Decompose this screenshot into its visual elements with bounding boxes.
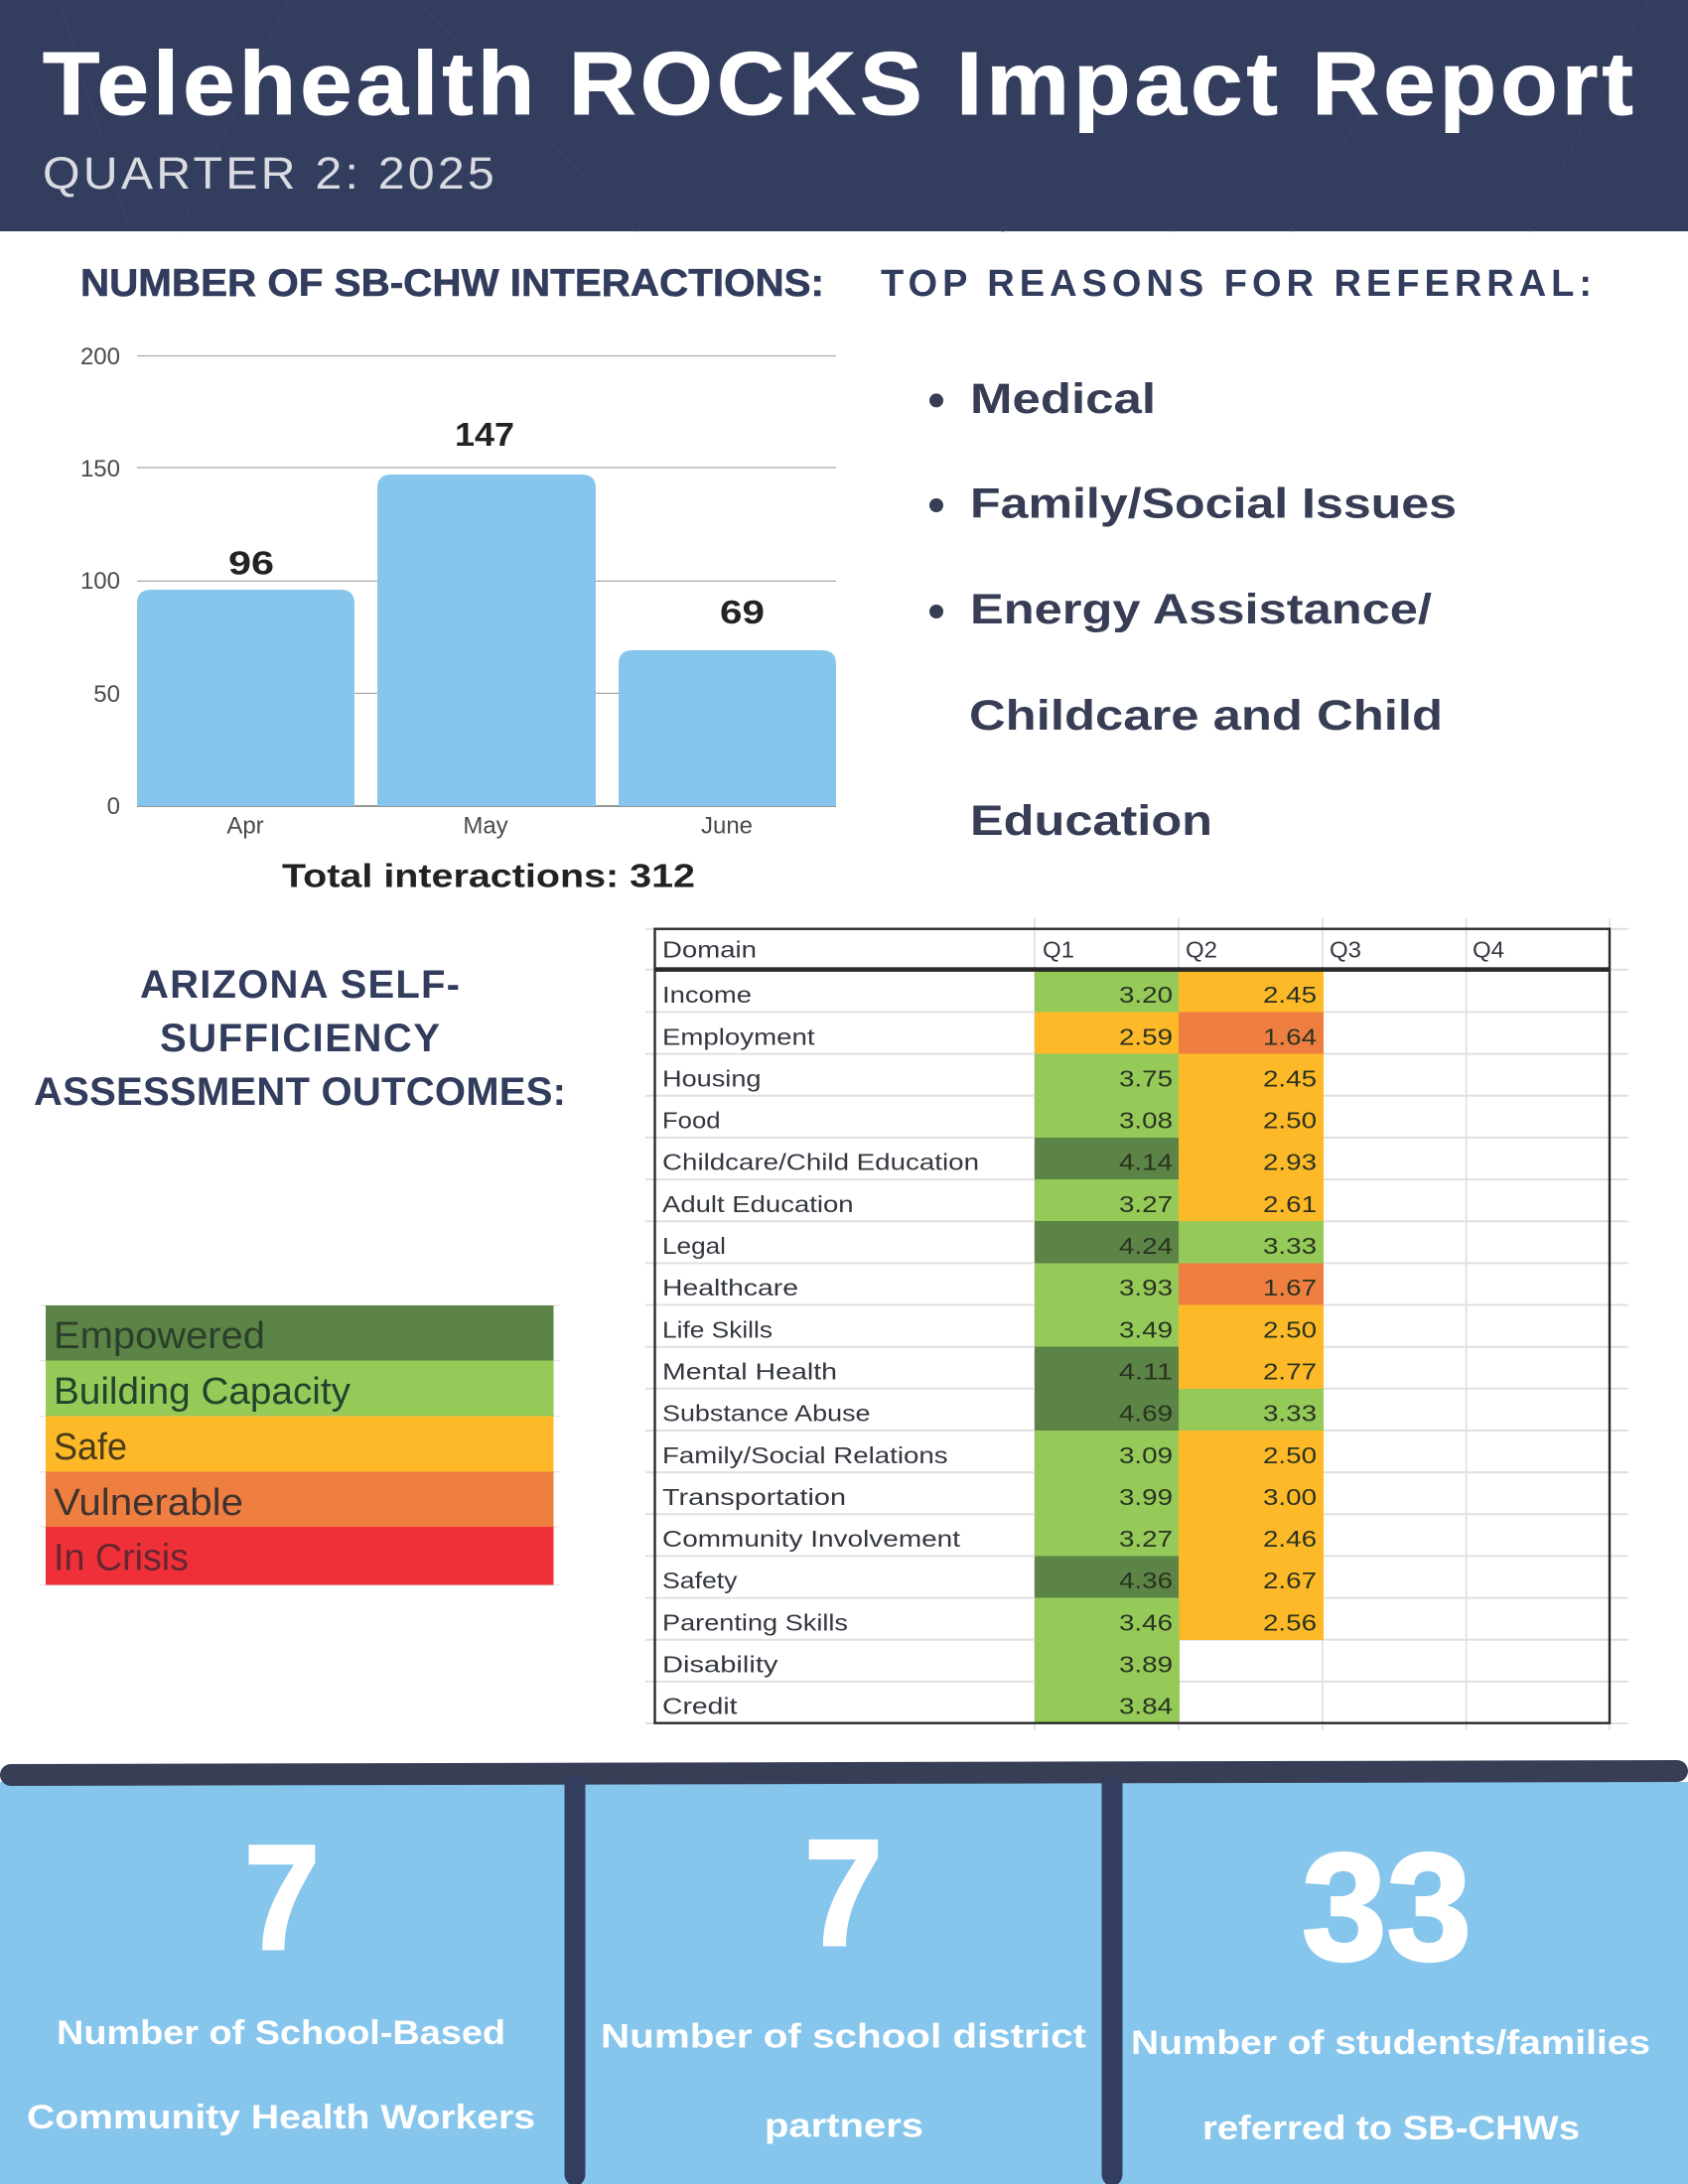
bar: June 69 — [619, 594, 836, 840]
row: Income: 3.20 — [1119, 982, 1173, 1008]
row: Life Skills: 3.49 — [1119, 1316, 1173, 1342]
row: Safety: Safety — [662, 1568, 738, 1593]
stat: school district partners — [601, 1809, 1086, 2145]
bar: April 96: Apr — [226, 812, 264, 840]
row: Family/Social Relations: Family/Social Relations — [662, 1442, 948, 1468]
row: Housing: 3.75 — [1119, 1065, 1173, 1091]
referral reasons list: Energy Assistance/ — [970, 586, 1432, 633]
row: Family/Social Relations — [662, 1431, 1324, 1473]
row: Life Skills: 2.50 — [1263, 1316, 1317, 1342]
row: Credit: Credit — [662, 1694, 738, 1719]
stat: students and families referred: Number of students/families — [1131, 2024, 1650, 2062]
subtitle: QUARTER 2: 2025 — [43, 148, 497, 199]
heading: self-sufficiency outcomes: SUFFICIENCY — [160, 1017, 440, 1060]
row: Employment: 1.64 — [1263, 1024, 1317, 1049]
row: Community Involvement: Community Involvement — [662, 1526, 961, 1552]
row: Life Skills — [662, 1304, 1324, 1347]
total interactions caption: Total interactions: 312 — [282, 858, 695, 893]
row: Parenting Skills: 2.56 — [1263, 1609, 1317, 1635]
row: Community Involvement: 3.27 — [1119, 1526, 1173, 1552]
stat: school district partners: partners — [765, 2108, 923, 2145]
y axis labels — [80, 343, 120, 820]
y axis labels: 0 — [107, 793, 120, 820]
heading: self-sufficiency outcomes: ASSESSMENT OUTCOMES: — [34, 1070, 566, 1114]
referral reasons list — [929, 375, 1457, 845]
row: Childcare/Child Education: 4.14 — [1119, 1150, 1173, 1175]
legend: assessment levels: Building Capacity — [54, 1371, 351, 1413]
stat: students and families referred — [1131, 1822, 1650, 2147]
stats band — [0, 1771, 1688, 2184]
row: Income — [662, 970, 1324, 1013]
y axis labels: 150 — [80, 456, 120, 482]
row: Healthcare: Healthcare — [662, 1275, 798, 1300]
legend: assessment levels: Safe — [54, 1427, 127, 1468]
bar: June 69: June — [701, 812, 753, 840]
row: Employment: 2.59 — [1119, 1024, 1173, 1049]
row: Transportation — [662, 1472, 1324, 1515]
bar chart: interactions by month — [80, 343, 836, 840]
row: Disability — [662, 1640, 1180, 1682]
row: Adult Education: Adult Education — [662, 1191, 854, 1217]
bar: April 96: 96 — [228, 545, 274, 582]
row: Childcare/Child Education: 2.93 — [1263, 1150, 1317, 1175]
heading: number of interactions: NUMBER OF SB-CHW INTERACTIONS: — [80, 262, 824, 305]
row: Childcare/Child Education: Childcare/Child Education — [662, 1150, 979, 1175]
stat: school district partners: Number of school district — [601, 2018, 1086, 2056]
row: Substance Abuse: 4.69 — [1119, 1401, 1173, 1427]
row: Food: Food — [662, 1108, 721, 1134]
row: Safety — [662, 1556, 1324, 1598]
row: Food: 2.50 — [1263, 1108, 1317, 1134]
row: Parenting Skills — [662, 1598, 1324, 1640]
row: Income: 2.45 — [1263, 982, 1317, 1008]
heading: self-sufficiency outcomes — [34, 963, 566, 1114]
legend: assessment levels: In Crisis — [54, 1538, 189, 1579]
row: Housing: 2.45 — [1263, 1065, 1317, 1091]
table header row — [662, 936, 1504, 962]
row: Mental Health: Mental Health — [662, 1358, 837, 1384]
referral reasons list: Childcare and Child — [969, 692, 1443, 740]
row: Legal: 3.33 — [1263, 1233, 1317, 1259]
row: Food: 3.08 — [1119, 1108, 1173, 1134]
heading: top reasons for referral: TOP REASONS FOR REFERRAL: — [881, 263, 1592, 305]
row: Substance Abuse — [662, 1389, 1324, 1431]
stat: school-based community health workers: Number of School-Based — [57, 2014, 505, 2052]
row: Safety: 4.36 — [1119, 1568, 1173, 1593]
row: Employment — [662, 1013, 1324, 1054]
row: Credit: 3.84 — [1119, 1694, 1173, 1719]
y axis labels: 200 — [80, 343, 120, 370]
row: Adult Education: 3.27 — [1119, 1191, 1173, 1217]
row: Mental Health: 4.11 — [1119, 1358, 1173, 1384]
stats band top bar — [11, 1771, 1677, 1775]
table header row: Q1 — [1043, 936, 1074, 962]
row: Housing: Housing — [662, 1065, 761, 1091]
row: Childcare/Child Education — [662, 1138, 1324, 1179]
row: Income: Income — [662, 982, 752, 1008]
stat: school district partners: 7 — [804, 1809, 883, 1978]
divider 2 — [1102, 1777, 1122, 2184]
row: Legal: Legal — [662, 1233, 726, 1259]
table header row: Q4 — [1473, 936, 1504, 962]
row: Mental Health: 2.77 — [1263, 1358, 1317, 1384]
referral reasons list: Family/Social Issues — [970, 480, 1457, 528]
stat: students and families referred: 33 — [1302, 1822, 1472, 1992]
row: Healthcare: 3.93 — [1119, 1275, 1173, 1300]
row: Mental Health — [662, 1347, 1324, 1389]
heading: self-sufficiency outcomes: ARIZONA SELF- — [140, 963, 460, 1007]
title: Telehealth ROCKS Impact Report — [43, 35, 1637, 134]
y axis labels: 100 — [80, 568, 120, 595]
row: Parenting Skills: Parenting Skills — [662, 1609, 848, 1635]
row: Healthcare: 1.67 — [1263, 1275, 1317, 1300]
row: Parenting Skills: 3.46 — [1119, 1609, 1173, 1635]
row: Housing — [662, 1054, 1324, 1096]
row: Disability: 3.89 — [1119, 1651, 1173, 1677]
bar: May 147: 147 — [455, 416, 514, 453]
row: Family/Social Relations: 2.50 — [1263, 1442, 1317, 1468]
header banner — [0, 0, 1688, 231]
legend: assessment levels: Empowered — [54, 1315, 265, 1357]
referral reasons list: Education — [970, 797, 1212, 845]
row: Food — [662, 1096, 1324, 1138]
referral reasons list: Medical — [970, 375, 1156, 423]
legend: assessment levels — [40, 1305, 560, 1585]
bar: June 69: 69 — [720, 594, 765, 630]
row: Community Involvement — [662, 1514, 1324, 1557]
stat: school-based community health workers — [27, 1814, 535, 2136]
stat: school-based community health workers: 7 — [244, 1814, 320, 1980]
row: Safety: 2.67 — [1263, 1568, 1317, 1593]
bar: May 147 — [377, 416, 596, 840]
stat: school-based community health workers: Community Health Workers — [27, 2099, 535, 2136]
divider 1 — [564, 1777, 586, 2184]
table header row: Domain — [662, 936, 757, 962]
stat: students and families referred: referred to SB-CHWs — [1202, 2110, 1580, 2147]
row: Employment: Employment — [662, 1024, 815, 1049]
row: Transportation: 3.00 — [1263, 1484, 1317, 1510]
row: Substance Abuse: 3.33 — [1263, 1401, 1317, 1427]
row: Transportation: 3.99 — [1119, 1484, 1173, 1510]
row: Legal: 4.24 — [1119, 1233, 1173, 1259]
row: Healthcare — [662, 1263, 1324, 1305]
row: Adult Education: 2.61 — [1263, 1191, 1317, 1217]
row: Disability: Disability — [662, 1651, 778, 1677]
table header row: Q3 — [1330, 936, 1361, 962]
table: domain scores by quarter — [645, 918, 1628, 1730]
row: Substance Abuse: Substance Abuse — [662, 1401, 870, 1427]
row: Adult Education — [662, 1179, 1324, 1222]
row: Family/Social Relations: 3.09 — [1119, 1442, 1173, 1468]
row: Credit — [662, 1682, 1180, 1723]
row: Legal — [662, 1221, 1324, 1264]
bar: May 147: May — [463, 812, 508, 840]
bar: April 96 — [137, 545, 354, 840]
table header row: Q2 — [1186, 936, 1217, 962]
row: Life Skills: Life Skills — [662, 1316, 773, 1342]
row: Transportation: Transportation — [662, 1484, 846, 1510]
y axis labels: 50 — [93, 681, 120, 708]
legend: assessment levels: Vulnerable — [54, 1482, 243, 1524]
row: Community Involvement: 2.46 — [1263, 1526, 1317, 1552]
